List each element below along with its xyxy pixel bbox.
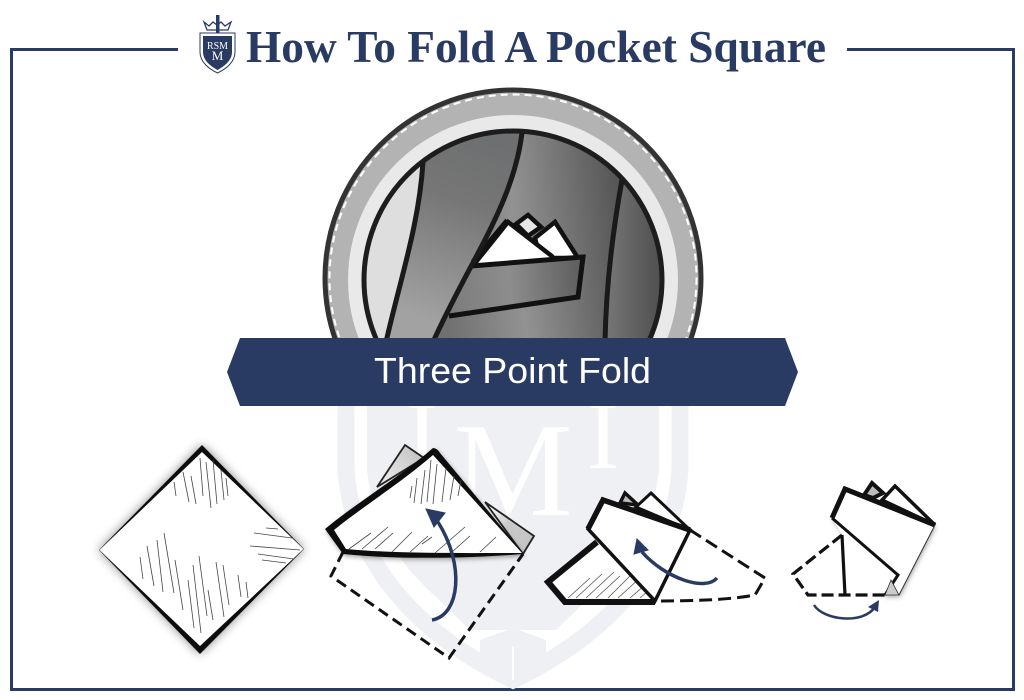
folded face fill: [334, 455, 522, 553]
step 4: final fold: [793, 483, 935, 619]
outer band: [346, 405, 680, 680]
outer ring: [322, 88, 704, 338]
folded face outline: [325, 448, 524, 558]
hatching: [568, 572, 648, 598]
title logo: M: [212, 48, 224, 63]
back points: [864, 483, 883, 498]
pocket: [451, 260, 580, 313]
hatching: [349, 460, 496, 553]
watermark shield: I: [406, 382, 438, 489]
back corners: [377, 445, 424, 487]
crown: [204, 22, 231, 30]
pocket square points: [474, 215, 578, 265]
face: [100, 452, 304, 646]
inner fill: [367, 405, 659, 630]
back panel: [832, 489, 935, 595]
arrow: [432, 522, 456, 620]
jacket panels: [366, 134, 660, 338]
watermark letters: M: [453, 396, 573, 544]
dashed flap: [793, 535, 885, 595]
tapered outline: [99, 445, 304, 654]
title: How To Fold A Pocket Square: [246, 21, 826, 72]
back points: [620, 493, 638, 505]
lower left flap: [548, 542, 655, 602]
inner circle outline: [362, 128, 664, 338]
watermark shield: [346, 382, 680, 680]
jacket badge: [322, 88, 704, 338]
fabric hatching: [140, 458, 300, 633]
dashed original position: [331, 552, 523, 658]
step 1: open square: [99, 445, 304, 654]
stitching: [328, 94, 698, 338]
arrow: [814, 605, 875, 619]
title logo: RSM: [207, 40, 228, 52]
step 2: fold bottom corner up: [325, 445, 534, 658]
title logo: [200, 15, 235, 73]
watermark shield: I: [587, 382, 619, 489]
chevron base: [480, 628, 546, 680]
banner: [227, 338, 798, 406]
arrow: [642, 552, 717, 584]
front square: [588, 500, 690, 601]
light ring: [348, 115, 678, 338]
step 3: fold right side over: [548, 493, 765, 602]
lapel seams: [386, 133, 622, 342]
front flap: [832, 518, 898, 595]
dashed outline: [655, 530, 765, 601]
shield: [200, 33, 235, 73]
banner: Three Point Fold: [374, 350, 651, 391]
fold line: [842, 535, 845, 595]
